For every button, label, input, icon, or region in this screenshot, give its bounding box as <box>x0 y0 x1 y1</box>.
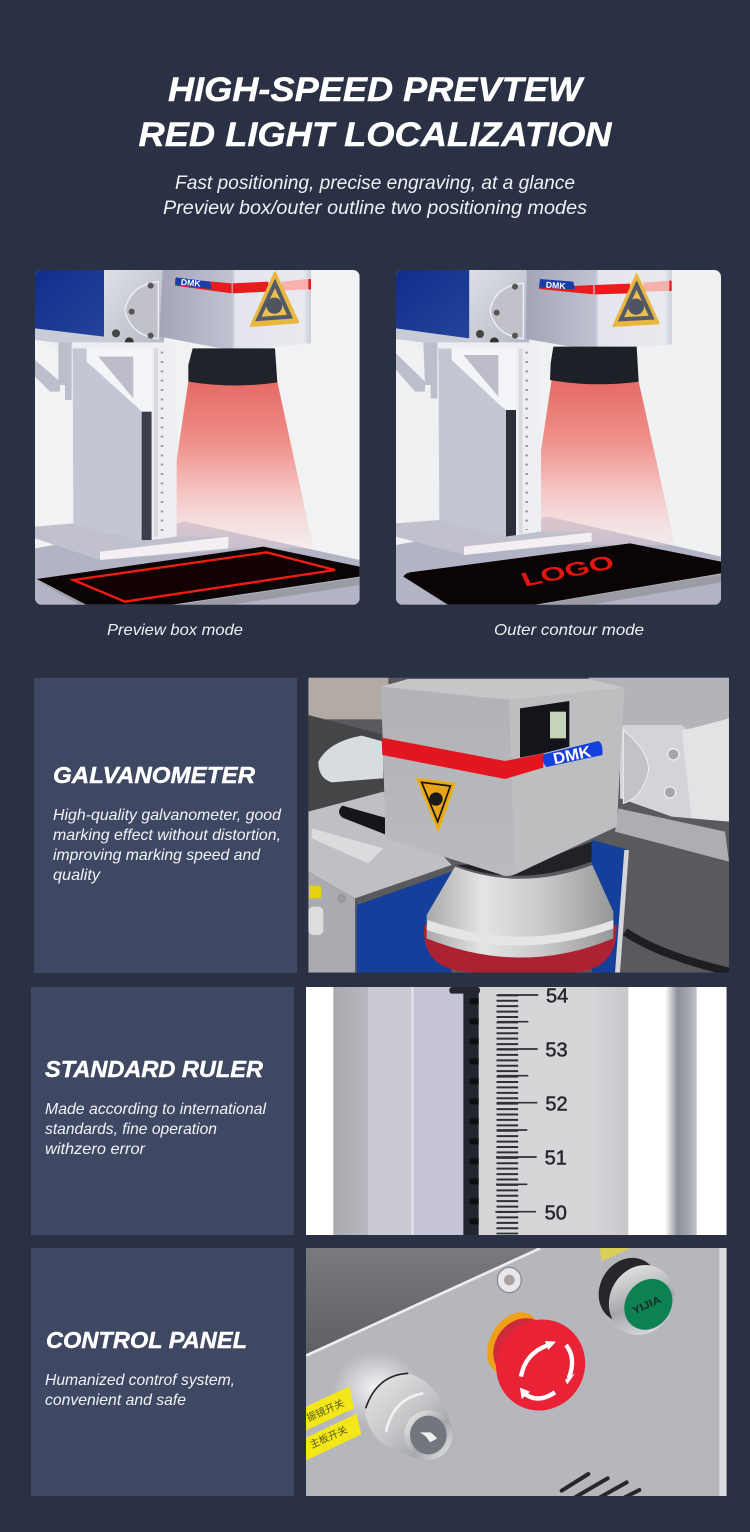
beam <box>163 382 313 548</box>
lens assembly <box>424 842 617 973</box>
cable <box>625 932 729 972</box>
scale numbers: 50 <box>545 1202 567 1224</box>
laser head: DMK <box>180 277 202 289</box>
subtitle: Preview box/outer outline two positioning modes <box>163 197 587 219</box>
ruler <box>516 347 541 537</box>
laser head <box>159 270 311 351</box>
title: HIGH-SPEED PREVTEW <box>168 71 586 109</box>
green button <box>587 1247 687 1347</box>
panel: preview box mode photo <box>35 270 360 605</box>
scale numbers <box>545 985 568 1224</box>
lens <box>550 347 639 384</box>
base plate <box>396 520 592 555</box>
scale numbers: 51 <box>545 1148 567 1170</box>
caption: preview box mode: Preview box mode <box>107 622 243 639</box>
dark rack <box>449 987 480 1235</box>
DMK label: DMK <box>552 744 593 768</box>
body: improving marking speed and <box>53 847 261 864</box>
DMK label <box>543 741 602 768</box>
slot <box>142 412 152 540</box>
heading: CONTROL PANEL <box>46 1327 247 1353</box>
body: withzero error <box>45 1141 146 1158</box>
beam <box>541 380 674 545</box>
blue cabinet <box>35 270 104 337</box>
QR sticker <box>520 701 569 758</box>
body: standards, fine operation <box>45 1121 217 1138</box>
laser head: DMK <box>546 280 567 291</box>
panel: standard ruler text <box>31 987 294 1235</box>
glove <box>318 736 383 782</box>
base plate <box>35 523 228 560</box>
subtitle <box>163 172 587 219</box>
yellow labels: 振镜开关 <box>304 1396 346 1424</box>
screw <box>497 1267 521 1293</box>
title <box>138 71 613 154</box>
lens <box>188 348 277 386</box>
body <box>53 807 282 884</box>
panel: control panel photo <box>304 1247 727 1497</box>
flange <box>469 270 529 347</box>
scale numbers: 54 <box>546 985 568 1007</box>
body: convenient and safe <box>45 1392 186 1409</box>
logo: LOGO <box>517 551 618 591</box>
blue cabinet <box>396 270 469 338</box>
table surface <box>396 517 721 605</box>
ruler <box>152 347 177 540</box>
tablet <box>403 543 721 605</box>
bracket <box>452 348 506 410</box>
heading: STANDARD RULER <box>45 1056 263 1082</box>
heading: GALVANOMETER <box>53 762 255 788</box>
body: quality <box>53 867 101 884</box>
table surface <box>35 522 360 605</box>
body: Made according to international <box>45 1101 266 1118</box>
vents <box>562 1474 639 1497</box>
blue cabinet <box>592 840 629 973</box>
warning label <box>417 778 455 832</box>
body: marking effect without distortion, <box>53 827 281 844</box>
tick marks <box>495 994 538 1234</box>
body: Humanized controf system, <box>45 1372 235 1389</box>
subtitle: Fast positioning, precise engraving, at a glance <box>175 172 575 194</box>
panel: control panel text <box>31 1248 294 1496</box>
yellow labels <box>304 1386 361 1460</box>
body <box>45 1372 235 1409</box>
recess <box>306 1248 540 1355</box>
rail <box>615 808 729 862</box>
bracket <box>86 348 142 412</box>
tablet <box>37 547 360 605</box>
title: RED LIGHT LOCALIZATION <box>138 116 613 154</box>
column <box>438 348 506 537</box>
caption: outer contour mode: Outer contour mode <box>494 622 644 639</box>
key switch <box>366 1373 453 1460</box>
galvanometer head <box>381 679 624 876</box>
left machine box <box>308 792 452 973</box>
warning triangle <box>251 272 298 326</box>
yellow labels: 主板开关 <box>308 1423 349 1451</box>
red preview rectangle <box>73 552 335 602</box>
warning triangle <box>613 274 659 326</box>
green button: YIJIA <box>631 1294 663 1317</box>
arrows <box>521 1345 572 1399</box>
laser head <box>526 270 672 351</box>
mount flange <box>620 718 729 822</box>
scale numbers: 52 <box>545 1093 568 1115</box>
scale strip <box>478 987 593 1235</box>
panel: outer contour mode photo <box>396 270 721 605</box>
scale numbers: 53 <box>545 1039 568 1061</box>
body <box>45 1101 266 1158</box>
column <box>73 348 142 542</box>
body: High-quality galvanometer, good <box>53 807 282 824</box>
panel: galvanometer photo <box>308 678 729 973</box>
slot <box>506 410 516 537</box>
panel: ruler photo <box>306 985 727 1235</box>
panel: galvanometer text <box>34 678 297 973</box>
flange <box>104 270 164 348</box>
emergency stop <box>476 1303 602 1427</box>
